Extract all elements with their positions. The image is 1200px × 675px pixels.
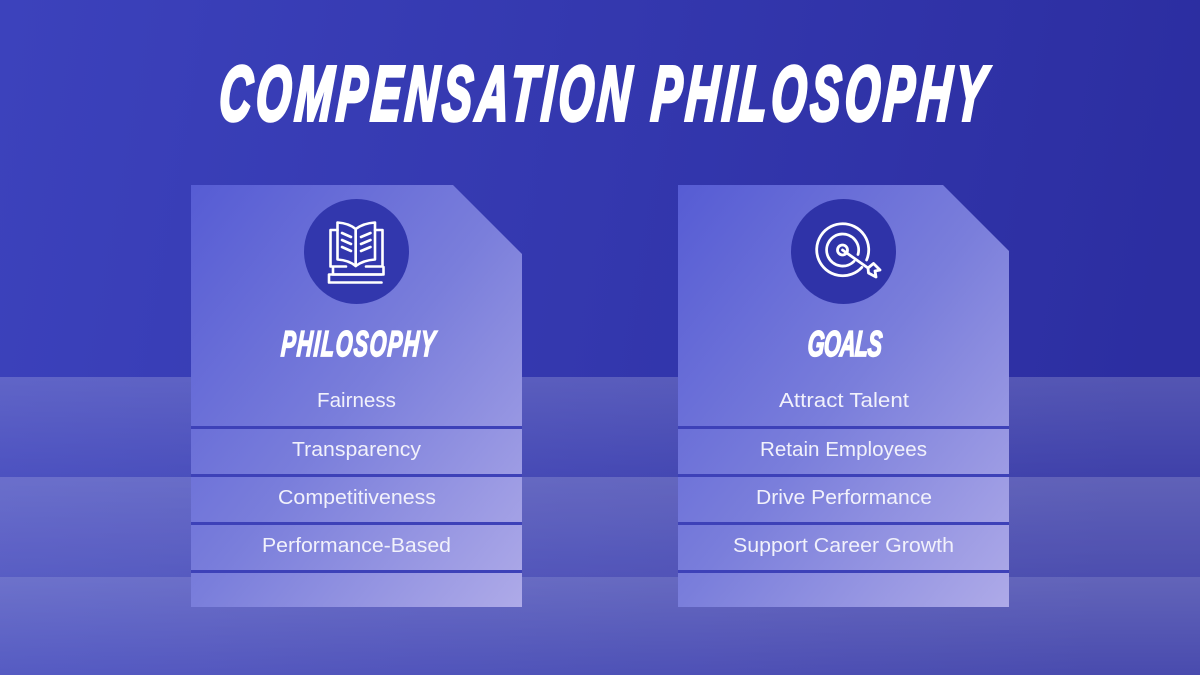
list: goals items: Drive Performance xyxy=(756,487,932,509)
list: goals items xyxy=(733,390,954,557)
row dividers xyxy=(191,426,522,573)
card background: philosophy xyxy=(191,185,522,607)
list: goals items: Attract Talent xyxy=(779,390,909,412)
icon: target with arrow xyxy=(817,224,880,277)
list: philosophy items: Transparency xyxy=(292,439,421,461)
list: goals items: Retain Employees xyxy=(760,439,927,461)
panel: philosophy xyxy=(191,185,522,607)
list: philosophy items: Fairness xyxy=(317,390,396,412)
list: goals items: Support Career Growth xyxy=(733,535,954,557)
heading: philosophy: PHILOSOPHY xyxy=(280,325,439,364)
list: philosophy items xyxy=(262,390,451,557)
heading: goals: GOALS xyxy=(806,325,884,364)
card background: goals xyxy=(678,185,1009,607)
icon circle: philosophy xyxy=(304,199,409,304)
row dividers xyxy=(678,426,1009,573)
list: philosophy items: Competitiveness xyxy=(278,487,436,509)
panel: goals xyxy=(678,185,1009,607)
title: COMPENSATION PHILOSOPHY xyxy=(217,52,992,137)
icon circle: goals xyxy=(791,199,896,304)
list: philosophy items: Performance-Based xyxy=(262,535,451,557)
icon: open book on stacked books xyxy=(329,222,384,282)
